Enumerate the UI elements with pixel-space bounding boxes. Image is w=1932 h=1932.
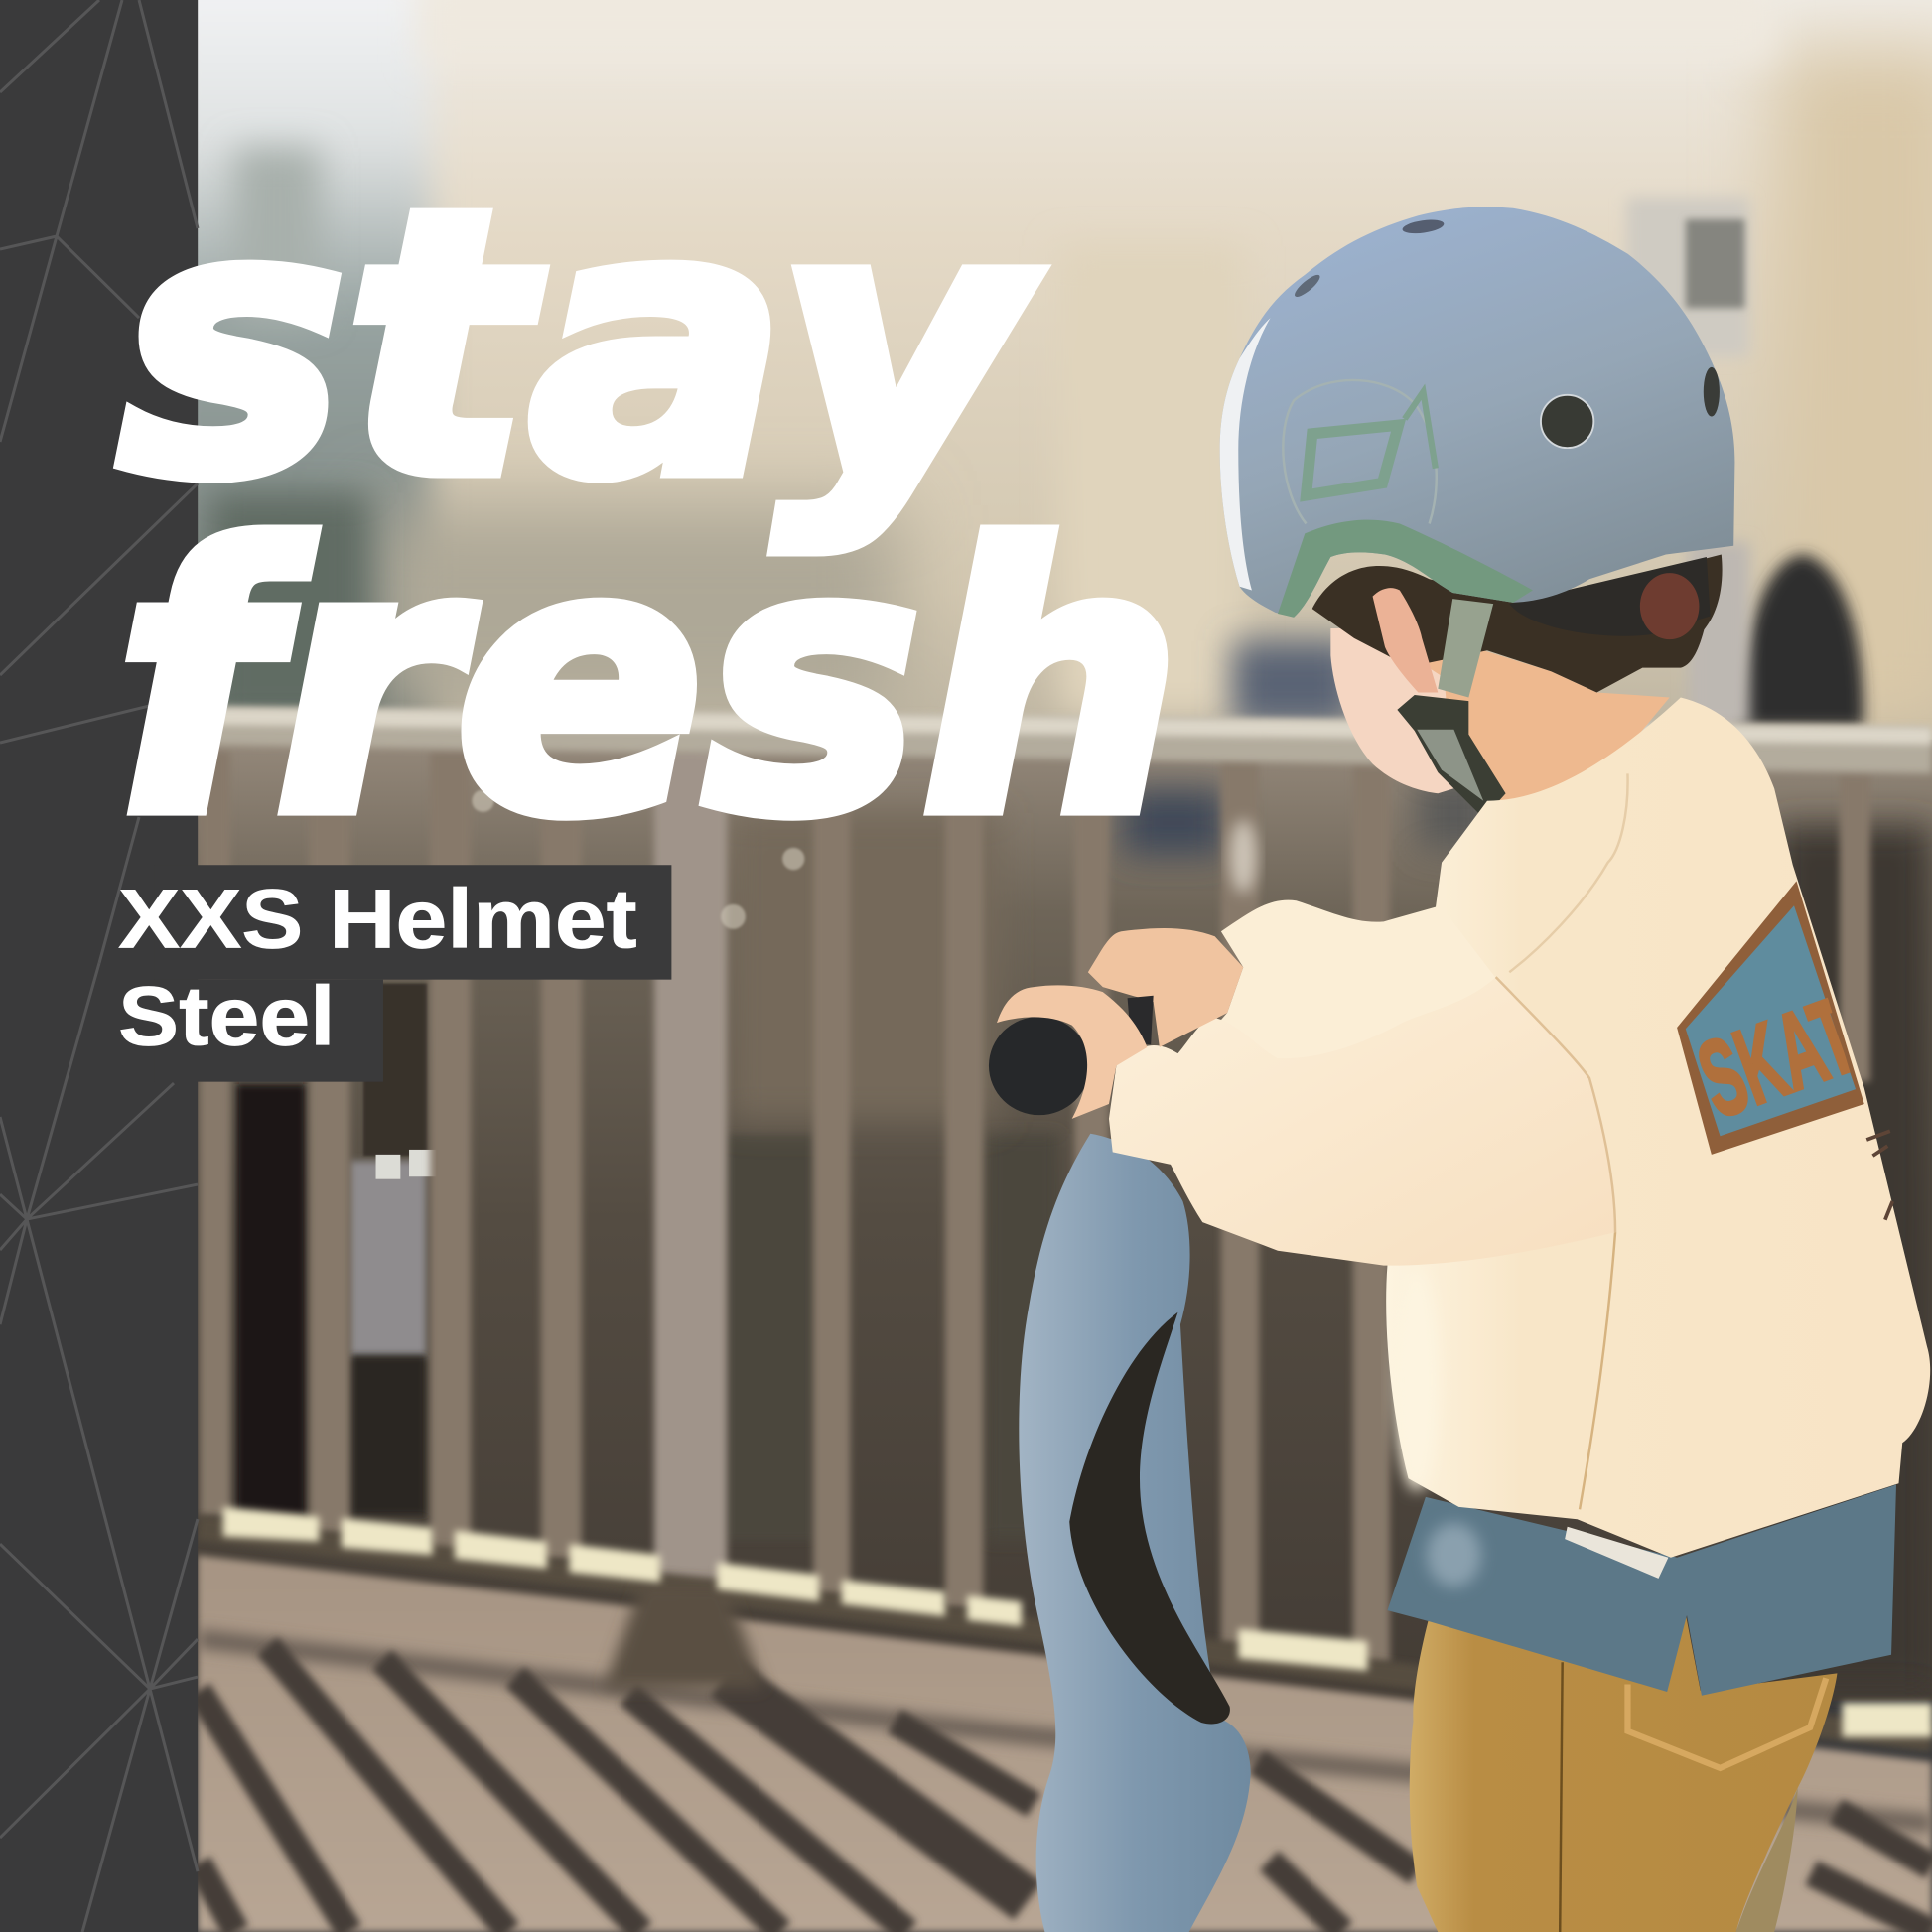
child [989, 207, 1930, 1932]
blurred building background [160, 0, 1932, 788]
dark side panel with geometric lines [0, 0, 198, 1932]
upper sleeve [1207, 900, 1497, 1097]
scooter [1019, 1134, 1251, 1932]
neck and face [1330, 592, 1670, 813]
helmet green band [1278, 520, 1533, 618]
title: stay fresh [116, 134, 1181, 895]
hands and grip [989, 928, 1243, 1119]
ground with fence shadows [198, 1507, 1932, 1932]
title: stay fresh: fresh [116, 472, 1181, 895]
scooter dark insert [1069, 1312, 1230, 1724]
undershirt [1387, 1484, 1896, 1696]
helmet vents [1292, 217, 1720, 448]
title: stay fresh: stay [118, 134, 1038, 557]
trousers [1410, 1614, 1837, 1932]
product name [118, 872, 637, 1062]
product name: Steel [118, 969, 336, 1062]
sweater [1109, 697, 1930, 1558]
helmet chin strap [1397, 599, 1506, 818]
clothing tag [1565, 1527, 1668, 1579]
hair [1312, 554, 1723, 692]
fence and background below the rail [198, 707, 1932, 1701]
helmet rim highlight [1220, 318, 1271, 590]
helmet [1220, 207, 1734, 618]
product name: XXS Helmet [118, 872, 637, 965]
helmet logo [1283, 380, 1437, 523]
back print [1677, 881, 1870, 1155]
product label boxes [154, 865, 671, 1082]
lower sleeve [1109, 977, 1615, 1266]
ear [1373, 588, 1438, 692]
